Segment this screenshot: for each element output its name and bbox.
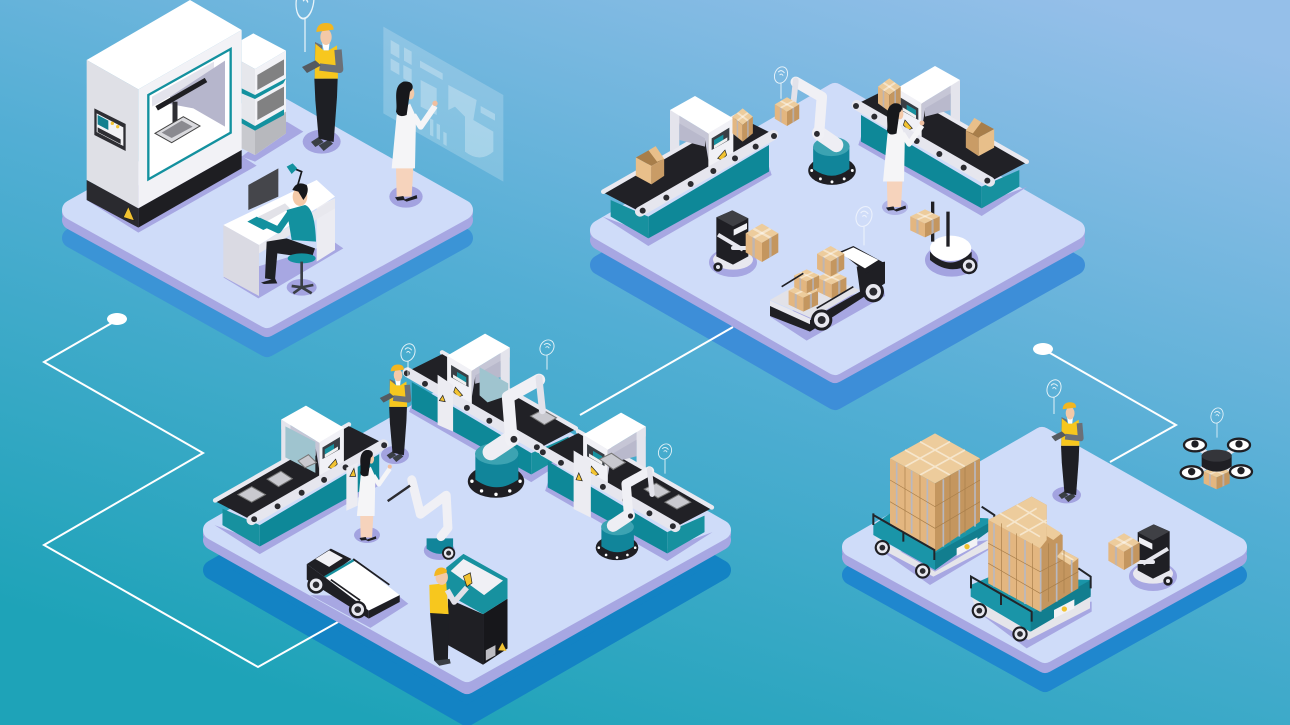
scene 2 left conveyor boxes (636, 108, 753, 184)
platform 2: packaging (600, 93, 1075, 373)
circuit boards on belts (238, 410, 691, 509)
scene 2 picker box (746, 224, 778, 262)
scene 2 lift robot (910, 202, 978, 277)
connector node right (1033, 343, 1053, 355)
server cabinet (242, 33, 286, 155)
gantry legs and glass (285, 367, 591, 518)
platform 3: assembly (213, 385, 721, 684)
scene 3 operator (429, 568, 467, 666)
scientist at hologram (392, 81, 438, 202)
scene 1 equipment (87, 0, 503, 298)
scene 4 mobile picker robot (1129, 524, 1177, 591)
worker base scene 4 (1052, 487, 1081, 503)
cart 2 (971, 577, 1092, 648)
icons: wifi scene 3 (399, 338, 674, 474)
scene 3 scientist (357, 450, 392, 541)
scene 3 flat cart (307, 549, 408, 628)
worker with tablet (302, 23, 340, 151)
box stack 2 (988, 497, 1078, 612)
box stack 1 (890, 433, 980, 552)
scene 2 arm box (775, 97, 799, 126)
platform 1: design and control (72, 100, 463, 327)
scene 4 worker (1051, 402, 1081, 502)
cart 1 (873, 513, 988, 585)
woman base (389, 186, 423, 208)
worker base (303, 130, 341, 154)
scene 3 worker base (381, 446, 409, 464)
icon: wifi scene 2 cart (853, 204, 875, 245)
connector lines (44, 320, 1176, 667)
scene 2 robot arm (793, 80, 856, 185)
scene 3 worker (380, 365, 408, 462)
cabinet shadow (242, 122, 303, 162)
scene 2 pallet cart (770, 246, 885, 341)
icons: wifi scene 4 (1045, 378, 1225, 438)
hologram screen (383, 27, 503, 182)
scene 3 right robot arm (596, 470, 652, 560)
scene 3 control console (446, 554, 508, 665)
icon: wifi scene 2 (772, 65, 790, 99)
scene 2 right conveyor boxes (878, 78, 994, 156)
scene 3 big robot arm (468, 378, 542, 498)
desk with engineer (223, 163, 343, 298)
scene 2 scientist (883, 103, 924, 212)
connector node left (107, 313, 127, 325)
scene 2 left conveyor (603, 96, 777, 246)
scene 4 picker box (1108, 533, 1140, 570)
scene 3 scientist base (354, 527, 380, 543)
scene 2 scientist base (882, 199, 908, 215)
drone (1181, 439, 1252, 489)
scene 2 mobile picker robot (709, 210, 757, 277)
scene 4 logistics (873, 433, 1252, 648)
machine shadow (87, 156, 257, 233)
platform 4: logistics (852, 437, 1237, 663)
scene 3 left conveyor (215, 406, 387, 554)
scene 3 middle conveyor (404, 334, 576, 482)
scene 3 right conveyor (540, 413, 712, 561)
icon: wifi scene 1 (293, 0, 317, 52)
platform shadows (72, 128, 1237, 716)
scene 2 right conveyor (853, 66, 1027, 216)
3D printer machine (87, 0, 242, 228)
scene 3 small mobile robot arm (388, 480, 455, 560)
